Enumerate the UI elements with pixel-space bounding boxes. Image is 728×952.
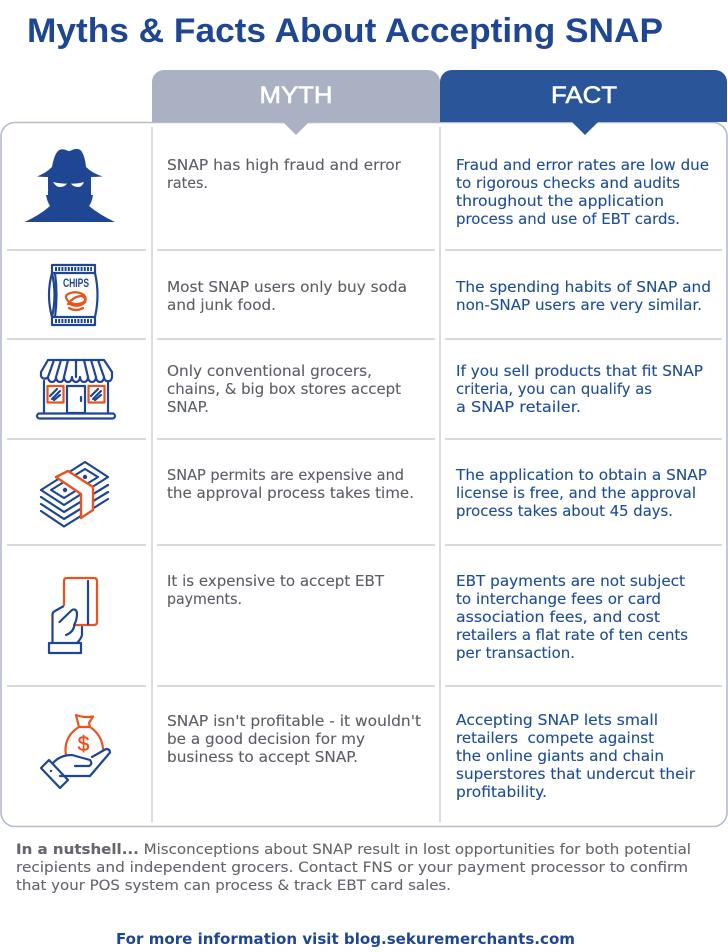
fact 5: to interchange fees or card	[456, 590, 661, 608]
fact 6: superstores that undercut their	[456, 765, 696, 783]
myth 2	[167, 278, 407, 314]
myth 6: be a good decision for my	[167, 730, 365, 748]
fact 3	[456, 362, 703, 416]
footer link text: For more information visit blog.sekuremerchants.com	[116, 930, 575, 948]
fact 4: The application to obtain a SNAP	[455, 466, 707, 484]
myth 6: business to accept SNAP.	[167, 748, 358, 766]
fact 1: to rigorous checks and audits	[456, 174, 680, 192]
icon: hand with money bag: $	[78, 733, 90, 756]
myth 5: It is expensive to accept EBT	[167, 572, 385, 590]
myth 3: Only conventional grocers,	[167, 362, 372, 380]
icon: chips bag	[49, 265, 98, 325]
fact 6: the online giants and chain	[456, 747, 664, 765]
fact 5: retailers a flat rate of ten cents	[456, 626, 688, 644]
header: fact: FACT	[551, 82, 617, 109]
myth 3: chains, & big box stores accept	[167, 380, 401, 398]
myth 1	[167, 156, 402, 192]
myth 3: SNAP.	[167, 398, 209, 416]
myth 4: the approval process takes time.	[167, 484, 414, 502]
header: fact	[440, 70, 727, 135]
fact 3: a SNAP retailer.	[456, 398, 581, 416]
nutshell note	[16, 842, 691, 894]
fact 4: process takes about 45 days.	[456, 502, 673, 520]
nutshell note: that your POS system can process & track EBT card sales.	[16, 878, 451, 894]
myth 2: and junk food.	[167, 296, 276, 314]
nutshell note: In a nutshell... Misconceptions about SNAP result in lost opportunities for both potential	[16, 842, 691, 858]
myth 2: Most SNAP users only buy soda	[167, 278, 407, 296]
myth 5: payments.	[167, 590, 242, 608]
fact 6: Accepting SNAP lets small	[456, 711, 658, 729]
myth 1: SNAP has high fraud and error	[167, 156, 402, 174]
header: myth: MYTH	[260, 82, 332, 109]
header: myth	[152, 70, 440, 135]
fact 2	[455, 278, 711, 314]
icon: chips bag: CHIPS	[63, 278, 89, 290]
fact 1	[456, 156, 709, 228]
icon: cash stack	[41, 462, 108, 526]
fact 6: retailers compete against	[456, 729, 654, 747]
myth 1: rates.	[167, 174, 208, 192]
icon: hand with money bag	[41, 715, 110, 788]
table panel	[1, 122, 727, 826]
fact 5: association fees, and cost	[456, 608, 660, 626]
title: Myths & Facts About Accepting SNAP	[27, 12, 663, 50]
myth 3	[167, 362, 401, 416]
fact 6	[456, 711, 696, 801]
fact 2: non-SNAP users are very similar.	[456, 296, 702, 314]
fact 1: Fraud and error rates are low due	[456, 156, 709, 174]
myth 4	[167, 466, 414, 502]
myth 6	[167, 712, 421, 766]
fact 3: criteria, you can qualify as	[456, 380, 652, 398]
fact 5	[456, 572, 688, 662]
fact 4: license is free, and the approval	[456, 484, 696, 502]
myth 4: SNAP permits are expensive and	[167, 466, 404, 484]
icon: store	[37, 360, 115, 418]
fact 5: per transaction.	[456, 644, 575, 662]
myth 5	[167, 572, 385, 608]
nutshell note: recipients and independent grocers. Contact FNS or your payment processor to confirm	[16, 860, 688, 876]
myth 6: SNAP isn't profitable - it wouldn't	[167, 712, 421, 730]
fact 6: profitability.	[456, 783, 547, 801]
icon: hand with card	[49, 578, 97, 653]
fact 1: process and use of EBT cards.	[456, 210, 680, 228]
icon: spy	[24, 149, 115, 222]
fact 3: If you sell products that fit SNAP	[456, 362, 703, 380]
fact 2: The spending habits of SNAP and	[455, 278, 711, 296]
fact 1: throughout the application	[456, 192, 664, 210]
fact 4	[455, 466, 707, 520]
fact 5: EBT payments are not subject	[456, 572, 685, 590]
